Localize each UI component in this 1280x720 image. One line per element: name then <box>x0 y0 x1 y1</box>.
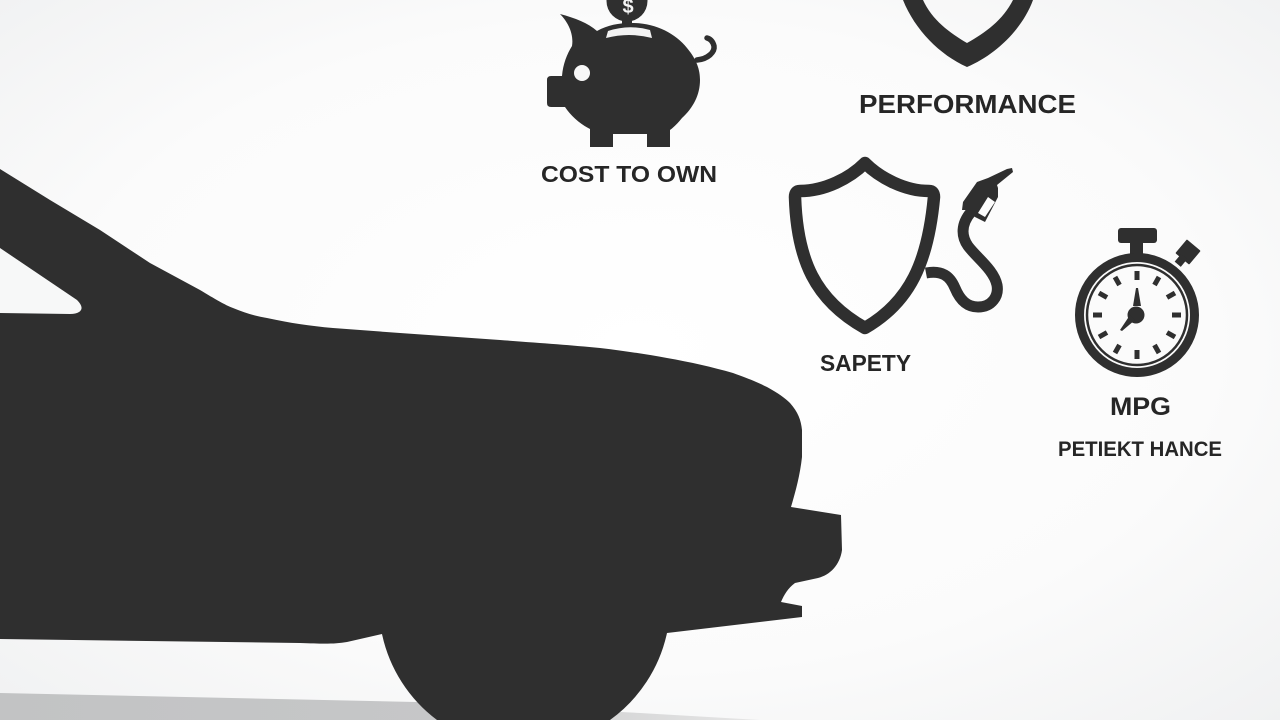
car silhouette <box>0 169 842 720</box>
label: mpg: MPG <box>1110 393 1171 421</box>
side button <box>1171 239 1201 270</box>
label: safety: SAPETY <box>820 350 911 376</box>
icon: stopwatch <box>1080 228 1201 372</box>
fuel hose <box>926 212 997 307</box>
icon: top shield <box>903 0 1033 67</box>
label: performance: PERFORMANCE <box>859 89 1076 119</box>
icon: shield with fuel nozzle <box>795 163 1013 328</box>
pig tail <box>697 38 714 60</box>
label: cost to own: COST TO OWN <box>541 161 717 187</box>
tick marks <box>1093 271 1181 359</box>
shield outline <box>795 163 934 328</box>
clock hands <box>1120 288 1144 331</box>
watch rings <box>1080 258 1194 372</box>
coin slot <box>606 27 652 38</box>
ground band <box>0 693 760 720</box>
label: garbled performance: PETIEKT HANCE <box>1058 438 1222 461</box>
coin <box>606 0 648 25</box>
pig eye <box>574 65 590 81</box>
pig body <box>547 14 700 147</box>
fuel nozzle <box>962 168 1013 222</box>
crown <box>1118 228 1157 243</box>
icon: piggy bank with coin <box>547 0 714 147</box>
car window <box>0 248 82 314</box>
